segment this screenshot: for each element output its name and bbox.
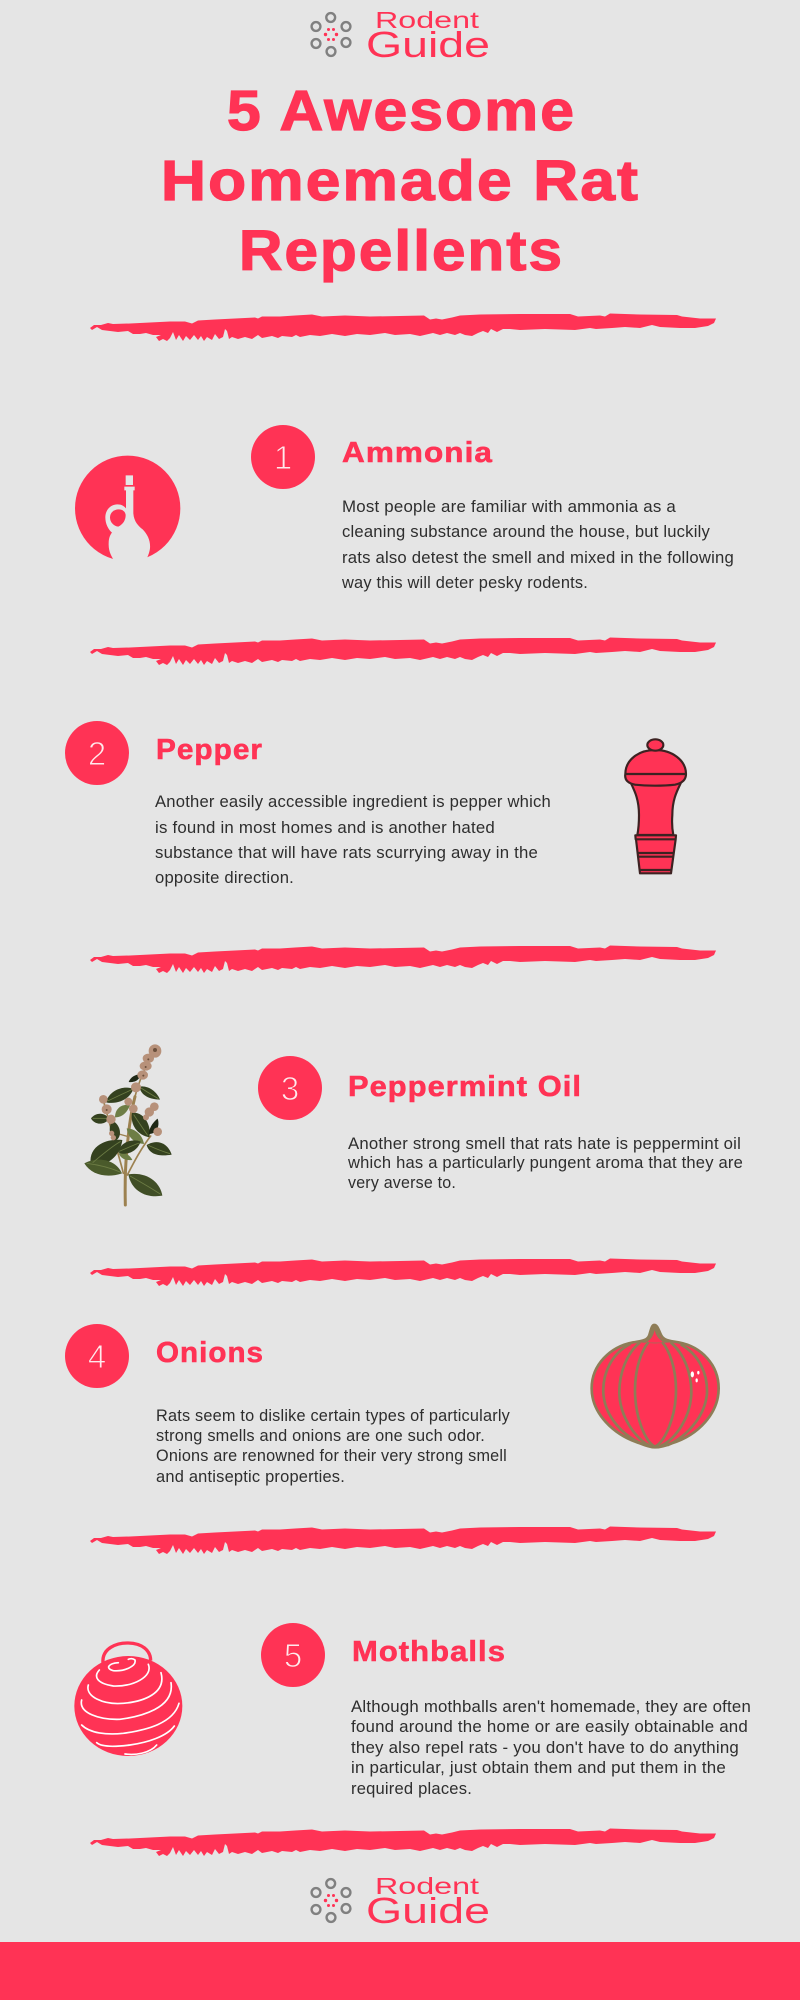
title <box>161 79 640 283</box>
panel: mothballs <box>74 1623 751 1798</box>
body text: pepper: is found in most homes and is another hated <box>155 819 495 837</box>
panel: peppermint oil <box>84 1044 743 1205</box>
body text: ammonia: Most people are familiar with ammonia as a <box>342 498 677 516</box>
body text: onions <box>156 1407 511 1486</box>
body text: mothballs: required places. <box>351 1780 472 1798</box>
body text: pepper: opposite direction. <box>155 869 294 887</box>
body text: mothballs: in particular, just obtain them and put them in the <box>351 1759 726 1777</box>
footer logo wordmark: Guide <box>366 1890 490 1931</box>
logo: top Rodent Guide <box>312 7 490 65</box>
number badge 3: 3 <box>281 1070 299 1107</box>
panel: ammonia <box>75 425 734 592</box>
icon: oil bottle <box>75 456 180 562</box>
icon: pepper mill <box>625 739 686 873</box>
number badge 1: 1 <box>274 439 292 476</box>
number badge 2 <box>65 721 129 785</box>
body text: pepper: Another easily accessible ingredient is pepper which <box>155 793 551 811</box>
body text: onions: and antiseptic properties. <box>156 1468 345 1486</box>
number badge 3 <box>258 1056 322 1120</box>
body text: ammonia: cleaning substance around the house, but luckily <box>342 523 711 541</box>
heading: Mothballs: Mothballs <box>352 1636 506 1668</box>
icon: peppermint plant <box>84 1044 172 1205</box>
body text: onions: Onions are renowned for their very strong smell <box>156 1447 507 1465</box>
footer logo wordmark: Rodent <box>375 1873 480 1899</box>
title: Homemade Rat <box>161 149 640 213</box>
icon: mothball <box>74 1643 182 1756</box>
logo wordmark <box>366 7 490 65</box>
body text: onions: Rats seem to dislike certain types of particularly <box>156 1407 511 1425</box>
panel: pepper <box>65 721 686 887</box>
body text: ammonia: rats also detest the smell and mixed in the following <box>342 549 734 567</box>
number badge 4: 4 <box>88 1338 106 1375</box>
number badge 5: 5 <box>284 1637 302 1674</box>
body text: ammonia: way this will deter pesky rodents. <box>341 574 588 592</box>
heading: Peppermint Oil: Peppermint Oil <box>348 1071 582 1103</box>
icon: footer logo rings <box>312 1879 350 1922</box>
title: 5 Awesome <box>227 79 576 143</box>
number badge 1 <box>251 425 315 489</box>
number badge 4 <box>65 1324 129 1388</box>
panel: onions <box>65 1324 719 1486</box>
heading: Ammonia: Ammonia <box>342 437 493 469</box>
body text: pepper <box>155 793 551 887</box>
body text: peppermint oil: very averse to. <box>348 1174 456 1192</box>
body text: onions: strong smells and onions are one such odor. <box>156 1427 485 1445</box>
title: Repellents <box>239 219 564 283</box>
body text: pepper: substance that will have rats scurrying away in the <box>155 844 538 862</box>
footer bar <box>0 1942 800 2000</box>
body text: mothballs: found around the home or are easily obtainable and <box>351 1718 748 1736</box>
body text: peppermint oil: which has a particularly pungent aroma that they are <box>347 1154 743 1172</box>
body text: peppermint oil <box>347 1135 743 1192</box>
body text: mothballs <box>351 1698 751 1798</box>
body text: mothballs: they also repel rats - you don't have to do anything <box>351 1739 739 1757</box>
number badge 2: 2 <box>88 735 106 772</box>
body text: ammonia <box>341 498 734 592</box>
logo wordmark: Rodent <box>375 7 480 33</box>
heading: Pepper: Pepper <box>156 734 263 766</box>
footer logo wordmark <box>366 1873 490 1931</box>
icon: onion <box>592 1325 719 1447</box>
logo: footer Rodent Guide <box>312 1873 490 1931</box>
icon: logo rings <box>312 13 350 56</box>
number badge 5 <box>261 1623 325 1687</box>
heading: Onions: Onions <box>156 1337 264 1369</box>
body text: peppermint oil: Another strong smell that rats hate is peppermint oil <box>348 1135 741 1153</box>
body text: mothballs: Although mothballs aren't homemade, they are often <box>351 1698 751 1716</box>
logo wordmark: Guide <box>366 24 490 65</box>
